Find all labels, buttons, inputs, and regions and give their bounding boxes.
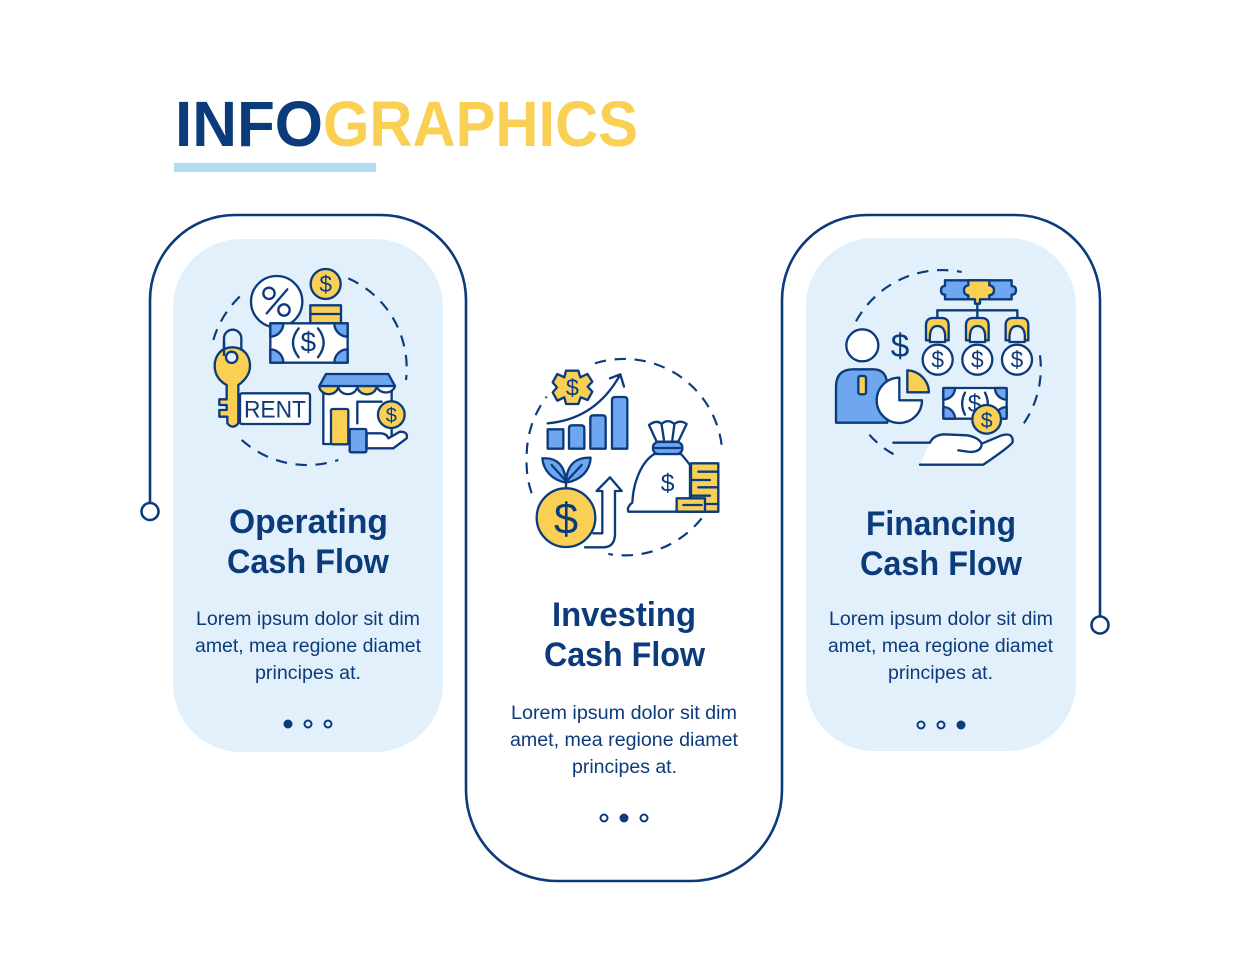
icon: investors and funding: $ — [971, 347, 984, 373]
heading: Investing — [552, 596, 696, 634]
body text: Lorem ipsum dolor sit dim — [511, 703, 737, 724]
icon: investors and funding: $ — [1011, 347, 1024, 373]
panel: financing cash flow — [806, 238, 1076, 751]
body text: principes at. — [255, 663, 361, 684]
body text: Lorem ipsum dolor sit dim — [829, 609, 1053, 630]
body text — [195, 609, 422, 684]
heading: Financing — [866, 505, 1016, 543]
body text: amet, mea regione diamet — [828, 636, 1054, 657]
pagination dots — [600, 814, 648, 822]
pagination dots — [284, 720, 332, 728]
icon: investors and funding: $ — [891, 328, 909, 365]
heading — [860, 505, 1023, 583]
body text: principes at. — [888, 663, 993, 684]
icon: investors and funding: $ — [981, 408, 993, 432]
title: INFO — [175, 88, 323, 160]
title — [174, 88, 638, 172]
body text: amet, mea regione diamet — [195, 636, 422, 657]
icon: growth and money bag: $ — [566, 374, 579, 400]
title: GRAPHICS — [323, 88, 638, 160]
icon: rent, bill and shop: $ — [386, 405, 397, 427]
icon: growth and money bag: $ — [554, 495, 578, 543]
icon: growth and money bag: $ — [661, 471, 675, 498]
heading: Cash Flow — [544, 636, 706, 674]
heading: Operating — [229, 503, 388, 541]
pagination dots — [918, 722, 964, 728]
body text: principes at. — [572, 757, 677, 778]
connecting outline — [142, 215, 1108, 881]
heading: Cash Flow — [227, 543, 390, 581]
icon: rent, bill and shop: RENT — [244, 397, 306, 424]
body text: amet, mea regione diamet — [510, 730, 739, 751]
icon: rent, bill and shop — [213, 269, 407, 465]
icon: investors and funding — [836, 270, 1041, 465]
icon: rent, bill and shop: $ — [301, 327, 317, 358]
icon: rent, bill and shop: $ — [319, 271, 332, 297]
icon: investors and funding: $ — [968, 391, 982, 418]
icon: investors and funding: $ — [931, 347, 944, 373]
body text: Lorem ipsum dolor sit dim — [196, 609, 420, 630]
heading — [544, 596, 706, 674]
body text — [828, 609, 1054, 684]
heading — [227, 503, 390, 581]
body text — [510, 703, 739, 778]
panel: investing cash flow — [510, 359, 739, 822]
heading: Cash Flow — [860, 545, 1023, 583]
icon: growth and money bag — [527, 359, 722, 555]
panel: operating cash flow — [173, 239, 443, 752]
